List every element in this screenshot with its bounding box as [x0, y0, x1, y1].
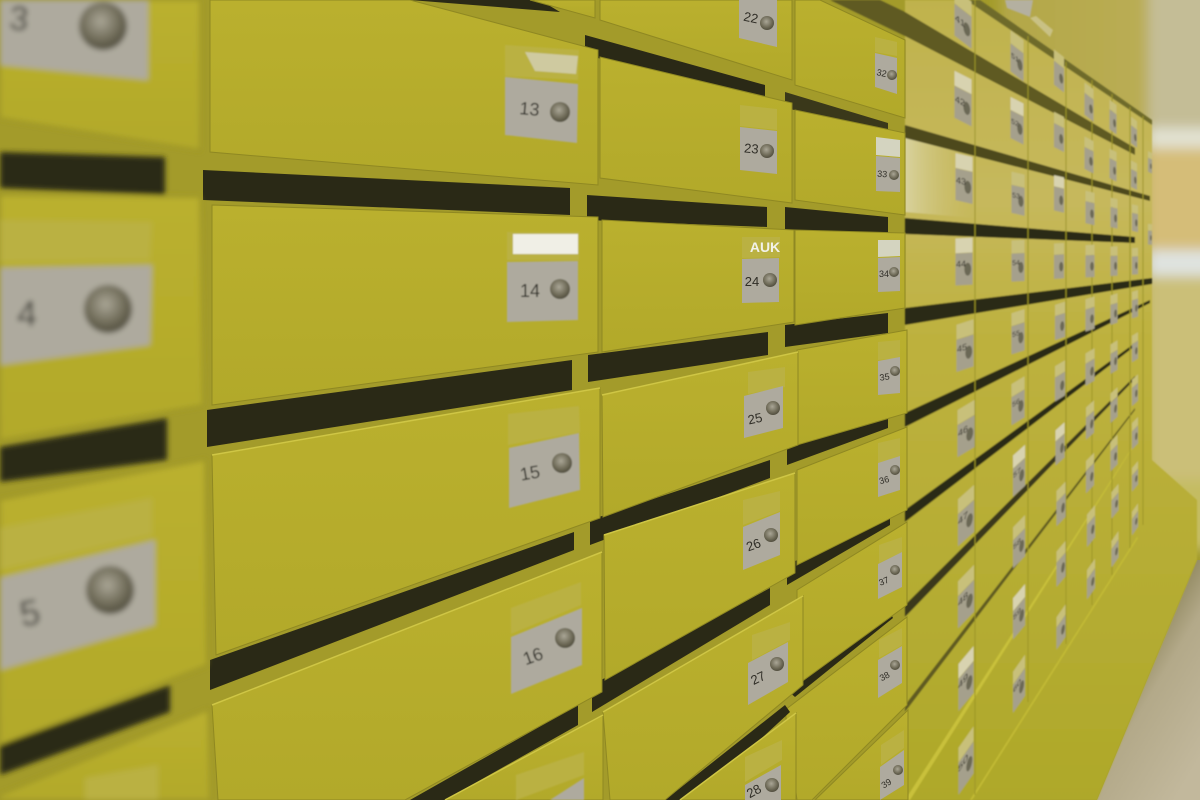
box 27 label — [748, 622, 790, 705]
box 13 label — [505, 45, 579, 143]
box 34 label — [878, 240, 900, 292]
mailbox column 13-16 — [203, 0, 603, 800]
box 4 label: 4 — [17, 293, 37, 334]
top rail notice plate — [1005, 0, 1053, 37]
floor — [1097, 560, 1200, 800]
box 17 label — [516, 752, 584, 800]
label column 41-50: 48 — [958, 590, 968, 610]
mailbox column 3-6: blurred foreground — [0, 0, 210, 800]
box 36 label — [878, 438, 900, 497]
label column 51-60: 57 — [1013, 464, 1021, 480]
box 35 label — [878, 340, 900, 395]
column 4 slots — [785, 92, 893, 697]
box top-edge highlights — [212, 388, 603, 800]
label column 41-50: 42 — [955, 94, 965, 109]
column 1 box faces — [0, 0, 210, 800]
sheen on box 43 — [905, 135, 975, 218]
box 24 label: 24 — [745, 274, 759, 289]
box 3 label — [0, 0, 148, 80]
far label columns — [1054, 49, 1152, 650]
label column 51-60: 56 — [1012, 396, 1020, 409]
label column 51-60: 52 — [1011, 116, 1019, 129]
box 22 label — [739, 0, 777, 47]
column 2 box faces — [210, 0, 603, 800]
box 37 label: 37 — [877, 575, 890, 588]
column seams — [975, 0, 1143, 795]
column 2 slots — [203, 0, 578, 800]
box 5 label: 5 — [16, 591, 43, 635]
label column 41-50: 46 — [958, 424, 968, 440]
column 4 box faces — [785, 0, 908, 800]
box 36 label: 36 — [878, 474, 890, 486]
label column 51-60: 60 — [1013, 676, 1021, 696]
box 25 label: 25 — [746, 410, 764, 427]
label column 51-60: 53 — [1012, 191, 1020, 201]
box 3 label: 3 — [8, 0, 30, 39]
box 37 label — [877, 537, 902, 599]
label column 41-50: 41 — [955, 13, 965, 31]
box 16 label: 16 — [520, 644, 546, 669]
box 39 label: 39 — [880, 777, 893, 790]
mailbox wall: far section — [830, 0, 1197, 800]
box 5 label — [0, 498, 155, 670]
box 25 label — [744, 367, 785, 438]
background: blurred corridor — [1000, 0, 1200, 550]
box 32 label — [875, 37, 897, 94]
label column 51-60: 55 — [1012, 329, 1020, 339]
box 14 label: 14 — [520, 281, 540, 301]
box 23 label — [740, 105, 777, 174]
label column 51-60: 58 — [1013, 535, 1021, 552]
label column 41-50: 50 — [958, 750, 968, 775]
label column 41-50 — [954, 0, 974, 795]
box 15 label — [508, 406, 580, 508]
label column 41-50: 43 — [956, 175, 966, 187]
column 3 box faces — [600, 0, 803, 800]
column 3 slots — [585, 35, 790, 800]
column 1 slots — [0, 152, 170, 775]
box 26 label — [743, 491, 780, 570]
box 26 label: 26 — [744, 535, 763, 554]
label column 51-60: 51 — [1011, 51, 1019, 65]
label column 51-60 — [1010, 30, 1025, 713]
box 15 label: 15 — [518, 462, 542, 485]
box 38 label: 38 — [878, 670, 891, 683]
label column 51-60: 54 — [1012, 260, 1020, 267]
box 32 label: 32 — [876, 67, 888, 79]
box 38 label — [878, 628, 902, 698]
box 13 label: 13 — [519, 98, 540, 120]
top rail and mail slots — [830, 0, 1152, 800]
box 33 label — [876, 137, 900, 192]
box 24 label — [742, 237, 780, 303]
box 28 label — [744, 740, 782, 800]
mailbox column 32-39 — [785, 0, 908, 800]
box 34 label: 34 — [879, 269, 889, 279]
box 39 label — [880, 730, 904, 800]
label column 41-50: 45 — [957, 342, 967, 355]
box 35 label: 35 — [879, 371, 890, 383]
box 24 label: AUK — [750, 239, 780, 255]
box 33 label: 33 — [877, 169, 888, 179]
label column 41-50: 47 — [958, 509, 968, 528]
box 14 label — [507, 232, 579, 322]
box 6 label — [85, 765, 158, 800]
label column 41-50: 44 — [956, 259, 966, 269]
box 16 label — [511, 582, 582, 694]
box 27 label: 27 — [748, 668, 768, 688]
box 23 label: 23 — [744, 140, 759, 157]
box 4 label — [0, 220, 152, 365]
label column 41-50: 49 — [958, 670, 968, 692]
box 22 label: 22 — [742, 9, 760, 26]
mailbox column 22-28 — [585, 0, 803, 800]
label column 51-60: 59 — [1013, 605, 1021, 622]
box top-edge highlights — [602, 352, 803, 800]
